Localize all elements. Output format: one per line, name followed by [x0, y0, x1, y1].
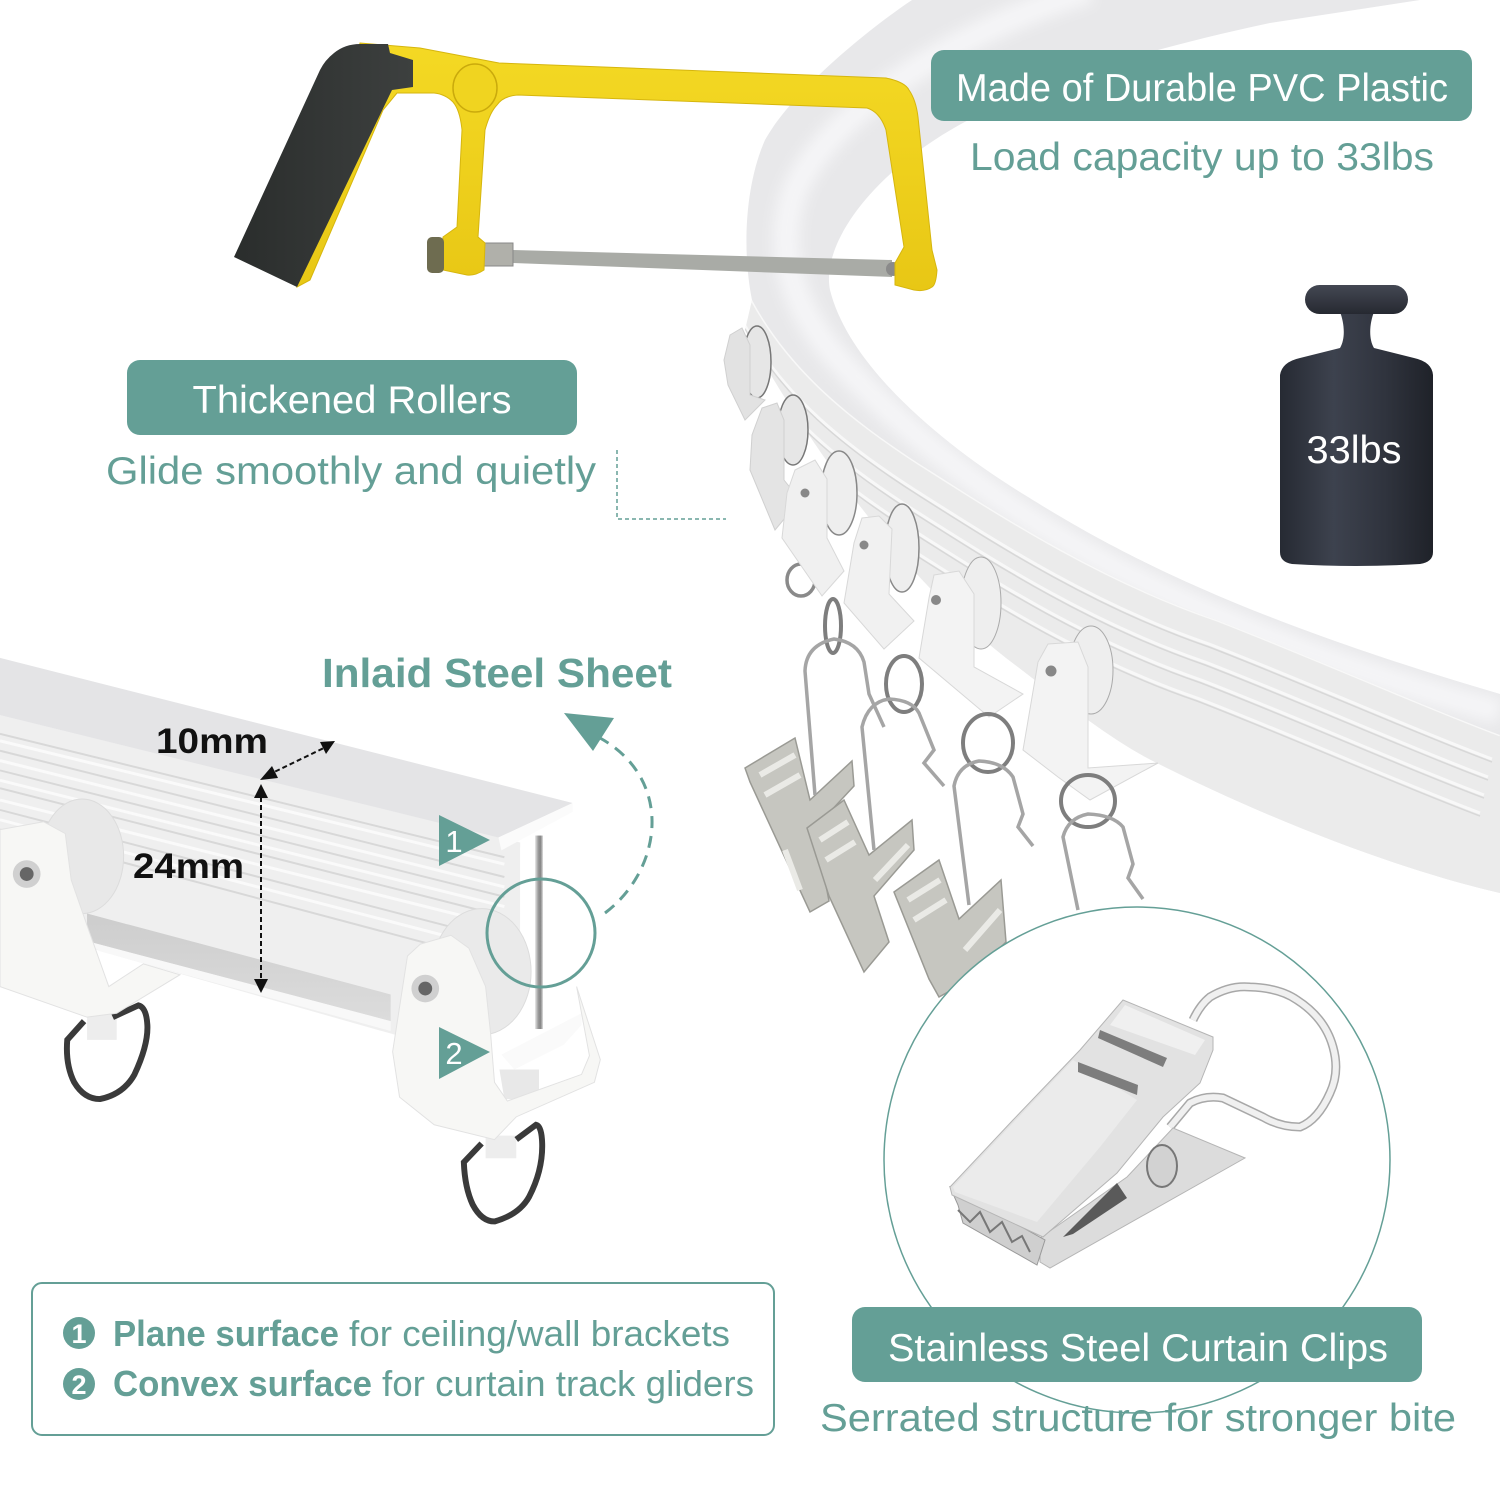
steel clips	[745, 738, 1006, 997]
hooks	[805, 639, 1143, 910]
glider 3	[782, 451, 857, 596]
connector line	[617, 450, 726, 519]
weight label: 33lbs	[1306, 429, 1402, 472]
bullet 2	[63, 1368, 95, 1400]
marker 2: 2	[445, 1036, 463, 1071]
callout circle: clip close-up	[884, 907, 1390, 1413]
shaded lower band	[87, 914, 391, 1021]
dimension: 10mm: 10mm	[156, 722, 268, 761]
dimension: 10mm	[156, 722, 335, 780]
clip 2	[807, 800, 914, 972]
marker 1: 1	[445, 824, 463, 859]
bullet 1	[63, 1317, 95, 1349]
marker 2	[439, 1027, 490, 1079]
curved track	[732, 0, 1500, 893]
ring	[787, 564, 815, 596]
close-up track section	[0, 658, 600, 1221]
clip 1	[745, 738, 854, 912]
text: glide: Glide smoothly and quietly	[106, 450, 597, 493]
legend line 2: Convex surface	[113, 1363, 372, 1404]
icon: hacksaw	[234, 43, 937, 291]
badge: rollers	[127, 360, 577, 435]
glider 5	[919, 557, 1023, 717]
left glider	[0, 799, 180, 1099]
text: load capacity: Load capacity up to 33lbs	[970, 136, 1434, 179]
clip 3	[894, 860, 1006, 997]
label: inlaid steel sheet: Inlaid Steel Sheet	[322, 650, 672, 696]
badge: PVC: Made of Durable PVC Plastic	[956, 67, 1448, 110]
legend line 2: for curtain track gliders	[382, 1363, 754, 1404]
bullet 1: 1	[71, 1319, 87, 1349]
rail top plate	[0, 658, 573, 838]
curtain rings	[825, 599, 1115, 827]
legend box	[32, 1283, 774, 1435]
dimension: 24mm	[133, 784, 268, 993]
magnifier circle	[487, 879, 595, 987]
glider 1	[724, 326, 771, 420]
legend line 1: Plane surface	[113, 1313, 339, 1354]
marker 1	[439, 815, 490, 866]
legend line 1: for ceiling/wall brackets	[349, 1313, 730, 1354]
dimension: 24mm: 24mm	[133, 847, 244, 886]
right glider	[393, 909, 600, 1221]
badge: PVC	[931, 50, 1472, 121]
glider 2	[750, 395, 808, 530]
badge: clips: Stainless Steel Curtain Clips	[888, 1327, 1388, 1370]
badge: rollers: Thickened Rollers	[192, 379, 512, 422]
weight icon	[1280, 285, 1433, 566]
glider 4	[844, 504, 919, 649]
rail side	[0, 715, 520, 1035]
rollers and gliders	[724, 326, 1158, 800]
legend line 2	[113, 1363, 754, 1404]
bullet 2: 2	[71, 1370, 87, 1400]
badge: clips	[852, 1307, 1422, 1382]
icon: metal clip	[950, 987, 1336, 1268]
steel sheet end	[520, 834, 560, 1029]
text: serrated: Serrated structure for stronger bite	[820, 1397, 1456, 1440]
curved dashed arrow	[564, 713, 652, 913]
legend line 1	[113, 1313, 730, 1354]
glider 6	[1023, 626, 1158, 800]
